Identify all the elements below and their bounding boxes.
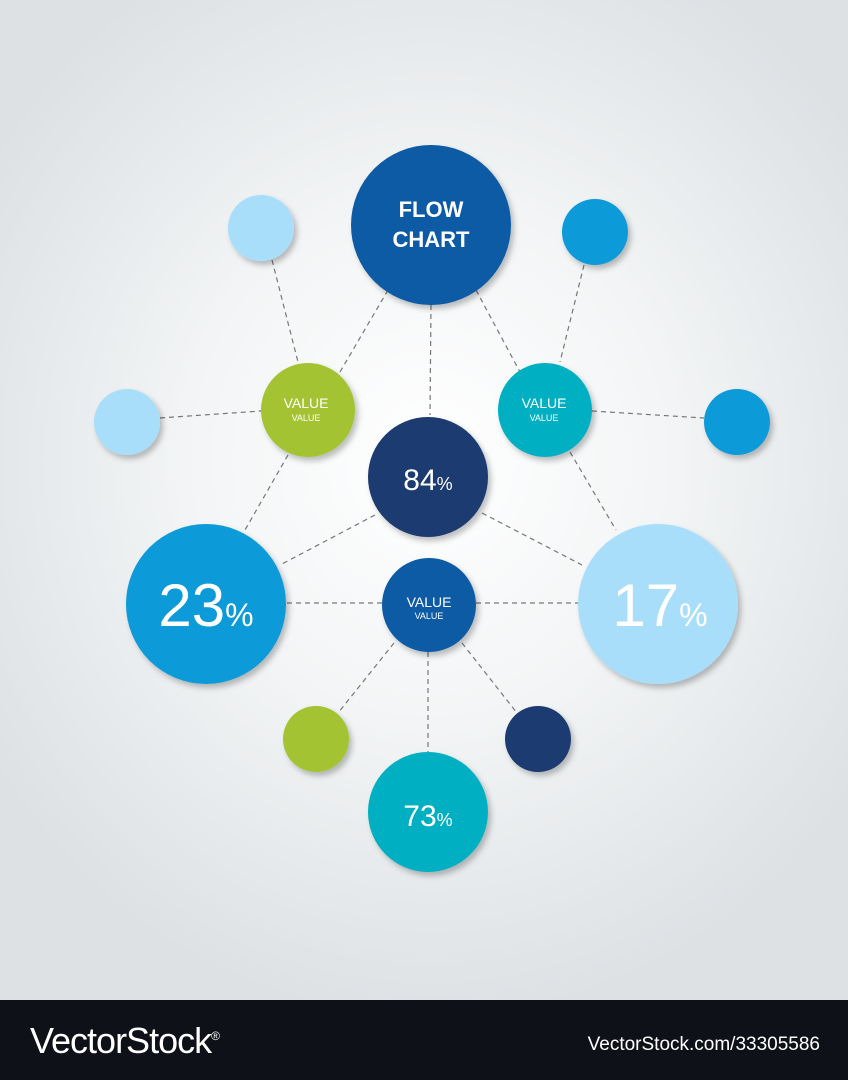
node: value teal: VALUE	[522, 395, 566, 411]
node: flow chart: FLOW	[399, 197, 464, 222]
node: 17%: 17%	[612, 572, 708, 639]
node: value green	[261, 363, 355, 457]
node: flow chart	[351, 145, 511, 305]
node: left small	[94, 389, 160, 455]
node: 84%: 84%	[403, 464, 453, 497]
node: value navy	[382, 558, 476, 652]
node: 84%	[368, 417, 488, 537]
node: value green: VALUE	[284, 395, 328, 411]
node: 17%	[578, 524, 738, 684]
footer logo: VectorStock®	[30, 1020, 219, 1061]
node: value green: VALUE	[292, 413, 320, 423]
node: top-right small	[562, 199, 628, 265]
node: value teal: VALUE	[530, 413, 558, 423]
footer bar	[0, 1000, 848, 1080]
node: green small	[283, 706, 349, 772]
node: 73%: 73%	[403, 800, 453, 833]
node: value navy: VALUE	[415, 611, 443, 621]
footer id: VectorStock.com/33305586	[588, 1034, 820, 1055]
node: right small	[704, 389, 770, 455]
node: 23%	[126, 524, 286, 684]
node: flow chart: CHART	[392, 227, 470, 252]
node: value teal	[498, 363, 592, 457]
node: value navy: VALUE	[407, 594, 451, 610]
node: navy small	[505, 706, 571, 772]
connectors	[160, 260, 704, 752]
node: 73%	[368, 752, 488, 872]
node: top-left small	[228, 195, 294, 261]
node: 23%: 23%	[158, 572, 254, 639]
